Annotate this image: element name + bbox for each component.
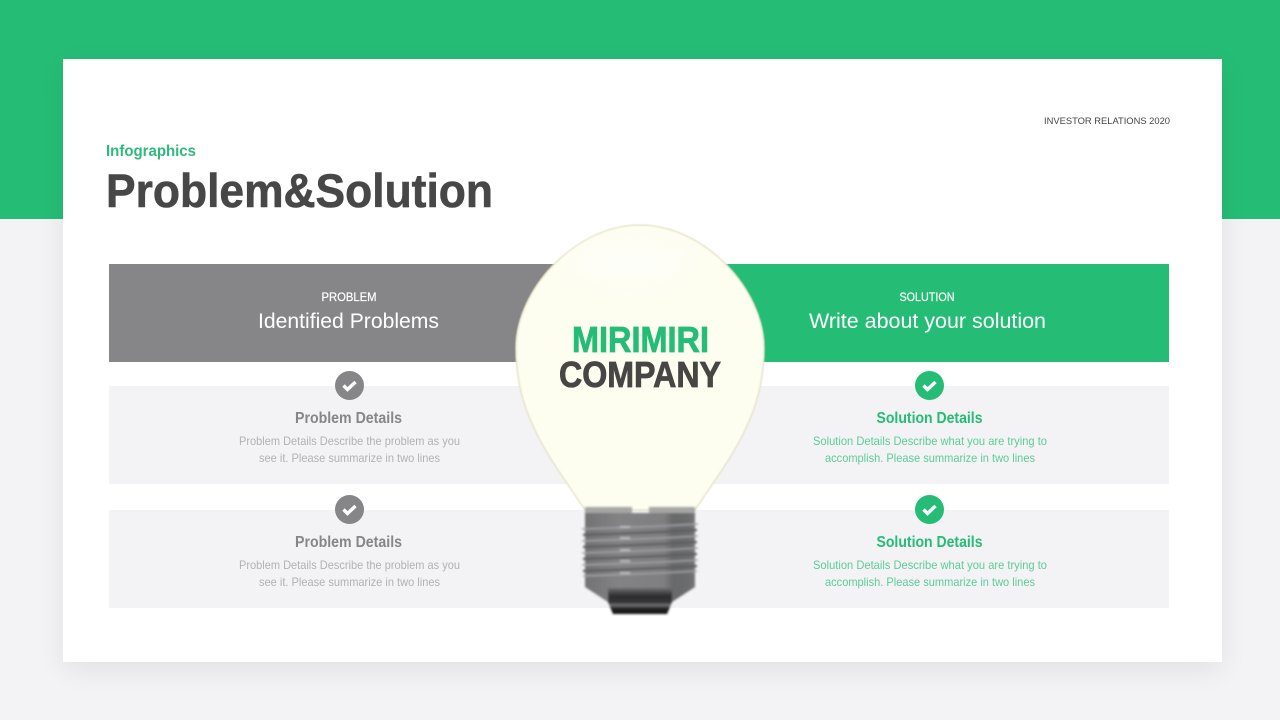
problem heading: Identified Problems [258, 310, 439, 333]
solution heading: Write about your solution [809, 310, 1046, 333]
problem details text: Problem Details Describe the problem as you [239, 434, 460, 448]
green top band [0, 0, 1280, 219]
bulb screw base [582, 507, 698, 614]
title: Problem&Solution [106, 164, 493, 217]
panel: solution header [690, 264, 1169, 362]
bulb highlight [572, 242, 688, 282]
solution details text: Solution Details Describe what you are trying to [813, 558, 1047, 572]
icon: check [335, 371, 364, 400]
icon: check [915, 371, 944, 400]
bulb label: MIRIMIRI [572, 319, 709, 360]
solution details text [813, 558, 1047, 589]
white card [63, 59, 1222, 662]
bulb glass [516, 225, 764, 510]
problem eyebrow: PROBLEM [322, 290, 376, 304]
solution details text: accomplish. Please summarize in two lines [825, 451, 1035, 465]
problem details text [239, 434, 460, 465]
problem details text: Problem Details Describe the problem as you [239, 558, 460, 572]
icon: check [335, 495, 364, 524]
panel: problem row 1 [109, 371, 640, 484]
solution details text: accomplish. Please summarize in two lines [825, 575, 1035, 589]
icon: check [915, 495, 944, 524]
problem details text [239, 558, 460, 589]
solution details text [813, 434, 1047, 465]
section label: Infographics [106, 143, 196, 160]
panel: solution row 1 [640, 371, 1169, 484]
card shadow [63, 67, 1222, 670]
panel: solution row 2 [640, 495, 1169, 608]
icon: light bulb [516, 225, 764, 614]
solution details heading: Solution Details [876, 410, 982, 427]
panel: problem header [109, 264, 589, 362]
problem details text: see it. Please summarize in two lines [259, 575, 440, 589]
problem details heading: Problem Details [295, 534, 402, 551]
header label: INVESTOR RELATIONS 2020 [1044, 116, 1170, 126]
solution details text: Solution Details Describe what you are trying to [813, 434, 1047, 448]
solution eyebrow: SOLUTION [900, 290, 954, 304]
problem details text: see it. Please summarize in two lines [259, 451, 440, 465]
problem details heading: Problem Details [295, 410, 402, 427]
solution details heading: Solution Details [876, 534, 982, 551]
icon: light bulb: COMPANY [559, 354, 721, 395]
panel: problem row 2 [109, 495, 640, 608]
